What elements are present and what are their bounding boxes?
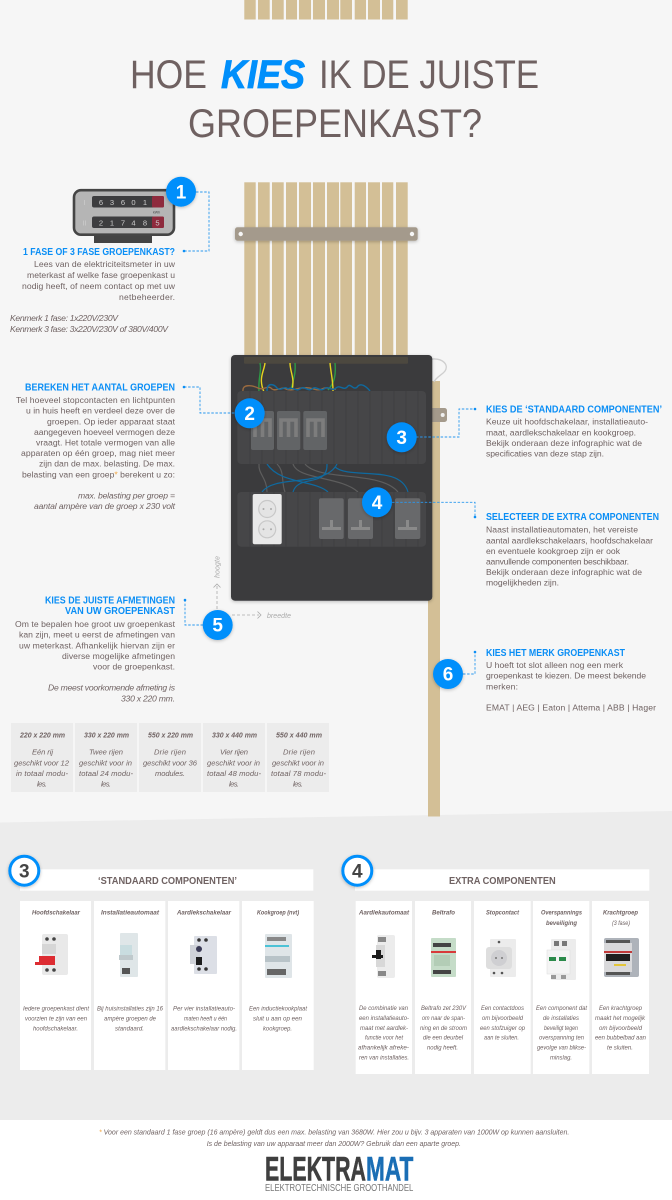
text block 3: standaard componenten: Keuze uit hoofdschakelaar, installatieauto- [486,417,648,427]
white footer band [0,1120,672,1200]
upper rail panel [237,391,426,464]
lower rail panel [237,492,426,547]
text block 1: fase: Kenmerk 3 fase: 3x220V/230V of 380V/400V [10,324,169,334]
text block 1: fase [10,247,176,334]
connector lines [183,192,476,674]
size 550 x 220: Drie rijen [154,748,186,756]
step badge 5: 5 [212,616,223,637]
size 220 x 220: geschikt voor 12 [14,758,70,768]
text block 2: aantal groepen: belasting van een groep* berekent u zo: [22,469,175,479]
card: installatieautomaat [94,901,165,1070]
electricity meter: 7 [121,218,125,228]
text block 3: standaard componenten: maat, aardlekschakelaar en kookgroep. [486,427,636,437]
size 330 x 220 [75,723,137,792]
size 220 x 220 [11,723,73,792]
size 550 x 440: Drie rijen [283,748,315,756]
size 550 x 220: modules. [155,769,185,778]
footnote: Is de belasting van uw apparaat meer dan 2000W? Gebruik dan een aparte groep. [207,1139,461,1148]
card: overspanningsbeveiliging: Een component dat [536,1005,588,1012]
size 330 x 220: totaal 24 modu- [79,769,133,778]
step badge 2: 2 [244,404,255,425]
electricity meter: 1 [110,218,114,228]
text block 4: extra componenten: aanvullende componenten beschikbaar. [486,556,629,566]
card: kookgroep: Kookgroep (nvt) [257,910,300,916]
text block 1: fase: Lees van de elektriciteitsmeter in uw [34,259,176,269]
photo: krachtgroep [604,938,639,977]
text block 5: afmetingen: VAN UW GROEPENKAST [65,606,175,617]
heading bar: EXTRA COMPONENTEN [449,875,556,887]
card: overspanningsbeveiliging: Overspannings [541,910,582,916]
card: stopcontact: een stofzuiger op [480,1025,525,1032]
text block 5: afmetingen [15,596,176,703]
lower wires [259,464,408,492]
electricity meter: I [83,198,86,207]
photo: beltrafo [431,938,456,977]
photo: kookgroep [265,934,292,978]
badge 3: 3 [19,862,30,882]
size 330 x 440 [203,723,265,792]
photo: hoofdschakelaar [35,934,68,975]
photo: aardlekautomaat [372,935,395,978]
card: aardlekautomaat: afhankelijk afreke- [358,1045,410,1052]
electricity meter: 8 [143,218,147,228]
logo: Elektramat: MAT [366,1151,413,1189]
electricity meter [74,190,174,243]
card: installatieautomaat: Bij huisinstallaties zijn 16 [97,1006,163,1012]
card: kookgroep [242,901,314,1070]
size 550 x 220 [139,723,201,792]
step badge 3 [387,422,417,452]
badge 4: 4 [352,862,363,882]
card: overspanningsbeveiliging: beveiliging [546,920,578,927]
dimension arrows [214,556,291,620]
grey components section background [0,811,672,1120]
heading bar [20,869,313,891]
photo: aardlekschakelaar [190,936,217,974]
title: HOE [130,53,207,97]
text block 2: aantal groepen: apparaten op één groep, mag niet meer [21,448,175,458]
text block 3: standaard componenten [486,404,662,459]
terminal bar [244,357,408,364]
card: kookgroep: kookgroep. [263,1026,292,1032]
card: beltrafo [415,901,471,1074]
text block 3: standaard componenten: specificaties van deze stap zijn. [486,449,604,459]
card: aardlekautomaat: een installatieauto- [359,1015,410,1022]
card: krachtgroep [592,901,649,1074]
card: installatieautomaat: standaard. [115,1026,144,1032]
electricity meter: 1 [143,198,147,207]
title: IK DE JUISTE [319,53,539,97]
badge 4 [343,856,372,885]
card: hoofdschakelaar: hoofdschakelaar. [33,1026,78,1032]
wooden slats behind the cabinet [244,182,408,362]
card: aardlekschakelaar: aardlekschakelaar nodig. [171,1026,237,1032]
text block 4: extra componenten [486,512,659,588]
card: beltrafo: nodig heeft. [427,1045,458,1052]
card: stopcontact: Stopcontact [486,910,520,916]
card: krachtgroep: om bijvoorbeeld [599,1025,642,1032]
card: overspanningsbeveiliging: gevolge van blikse- [537,1045,587,1052]
text block 2: aantal groepen: Tel hoeveel stopcontacten en lichtpunten [16,395,175,405]
text block 6: merk: EMAT | AEG | Eaton | Attema | ABB | Hager [486,703,656,713]
text block 3: standaard componenten: Bekijk onderaan deze infographic wat de [486,438,642,448]
card: krachtgroep: te sluiten. [607,1045,633,1052]
size 550 x 440: totaal 78 modu- [271,769,326,778]
step badge 6 [433,659,463,689]
text block 2: aantal groepen: BEREKEN HET AANTAL GROEPEN [25,382,175,394]
step badge 3: 3 [396,428,407,449]
text block 2: aantal groepen: u in huis heeft en verdeel deze over de [26,406,175,416]
card: installatieautomaat: ampère groepen de [104,1016,156,1022]
card: kookgroep: sluit u aan op een [253,1016,302,1022]
size 330 x 440: totaal 48 modu- [207,769,261,778]
card: overspanningsbeveiliging: beveiligt tegen [544,1025,578,1032]
electricity meter: 2 [99,218,103,228]
card: aardlekautomaat: functie voor het [365,1035,404,1042]
text block 1: fase: nodig heeft, of neem contact op met uw [22,281,176,291]
step badge 4 [362,487,392,517]
size 330 x 440: les. [229,780,239,788]
text block 5: afmetingen: Om te bepalen hoe groot uw groepenkast [15,619,176,629]
card: stopcontact: om bijvoorbeeld [482,1015,523,1022]
upper wires [243,363,370,392]
text block 2: aantal groepen: zijn dan de max. belasting. De max. [39,459,175,469]
text block 5: afmetingen: kan zijn, meet u eerst de afmetingen van [19,630,175,640]
text block 4: extra componenten: Naast installatieautomaten, het vereiste [486,525,638,535]
text block 5: afmetingen: uw meterkast. Afhankelijk hiervan zijn er [19,640,175,650]
card: krachtgroep: een bubbelbad aan [595,1035,646,1042]
card: krachtgroep: Krachtgroep [603,910,638,916]
size 550 x 220: 550 x 220 mm [148,730,193,740]
title: GROEPENKAST? [188,102,482,146]
electricity meter: 6 [99,198,103,207]
card: overspanningsbeveiliging: minslag. [550,1054,572,1061]
footnote [99,1128,569,1148]
size 550 x 440 [267,723,329,792]
card: hoofdschakelaar [20,901,91,1070]
text block 6: merk: groepenkast te kiezen. De meest bekende [486,671,646,681]
step badge 1 [166,177,196,207]
electricity meter: 3 [110,198,114,207]
wooden post on the right [428,381,440,817]
text block 2: aantal groepen: vraagt. Het totale vermogen van alle [36,437,175,447]
size 550 x 220: geschikt voor 36 [143,758,198,768]
card: hoofdschakelaar: Hoofdschakelaar [32,910,80,916]
card: kookgroep: Een inductiekookplaat [249,1006,308,1012]
step badge 1: 1 [176,182,187,204]
card: aardlekschakelaar [168,901,239,1070]
text block 4: extra componenten: Bekijk onderaan deze infographic wat de [486,567,642,577]
card: aardlekschakelaar: Aardlekschakelaar [176,910,231,916]
size table [11,723,329,792]
card: krachtgroep: Een krachtgroep [599,1005,642,1012]
top wooden strip [244,0,408,20]
text block 6: merk: merken: [486,681,518,691]
text block 5: afmetingen: 330 x 220 mm. [121,693,175,703]
card: aardlekschakelaar: Per vier installatieauto- [173,1006,236,1012]
panel: extra componenten [343,856,649,1074]
text block 1: fase: 1 FASE OF 3 FASE GROEPENKAST? [23,247,175,258]
electricity meter: 5 [155,218,160,228]
card: aardlekautomaat: Aardlekautomaat [358,910,410,916]
heading bar [355,869,649,891]
card: aardlekschakelaar: maten heeft u één [184,1016,227,1022]
text block 5: afmetingen: diverse mogelijke afmetingen [62,651,175,661]
card: hoofdschakelaar: voorzien te zijn van een [25,1016,87,1022]
photo: stopcontact [486,939,516,977]
text block 4: extra componenten: aantal aardlekschakelaars, hoofdschakelaar [486,535,653,545]
badge 3 [10,856,39,885]
photo: overspanningsbeveiliging [547,939,576,980]
card: overspanningsbeveiliging: de installaties [543,1015,580,1022]
dimension arrows: breedte [267,613,291,620]
text block 4: extra componenten: en eventuele kookgroep zijn er ook [486,546,621,556]
electricity meter: II [82,218,87,228]
card: beltrafo: ning en de stroom [420,1025,467,1032]
electricity meter: 6 [121,198,125,207]
text block 2: aantal groepen: aangegeven hoeveel vermogen deze [34,427,175,437]
size 330 x 440: Vier rijen [220,748,248,756]
title: KIES [221,53,305,97]
white socket [253,494,282,544]
size 330 x 220: les. [101,780,111,788]
step badge 4: 4 [372,493,383,514]
step badge 6: 6 [443,665,453,686]
card: aardlekautomaat: De combinatie van [359,1005,408,1012]
mounting bar [235,227,418,241]
text block 2: aantal groepen: aantal ampère van de groep x 230 volt [34,501,176,511]
text block 2: aantal groepen: max. belasting per groep = [78,491,175,501]
card: krachtgroep: maakt het mogelijk [595,1015,646,1022]
card: stopcontact: aan te sluiten. [484,1035,519,1042]
size 330 x 440: 330 x 440 mm [212,730,257,740]
card: stopcontact [474,901,531,1074]
text block 4: extra componenten: mogelijkheden zijn. [486,578,559,588]
card: beltrafo: die een deurbel [423,1035,463,1042]
text block 6: merk [486,648,656,713]
size 330 x 220: 330 x 220 mm [84,730,129,740]
card: aardlekautomaat [356,901,412,1074]
card: installatieautomaat: Installatieautomaat [101,910,160,916]
logo: Elektramat: ELEKTRA [265,1151,366,1189]
heading bar: ‘STANDAARD COMPONENTEN’ [98,875,237,887]
size 550 x 440: geschikt voor in [272,758,324,768]
card: stopcontact: Een contactdoos [481,1005,525,1012]
standard modules [251,411,327,450]
step badge 2 [235,398,265,428]
electricity meter: 4 [131,218,136,228]
card: krachtgroep: (3 fase) [612,920,630,927]
size 330 x 440: geschikt voor in [207,758,260,768]
size 330 x 220: geschikt voor in [79,758,132,768]
electricity meter: kWh [153,210,160,214]
size 550 x 440: les. [293,780,303,788]
card: aardlekautomaat: ren van installaties. [359,1054,409,1061]
size 220 x 220: Eén rij [32,748,53,756]
size 220 x 220: 220 x 220 mm [19,730,65,740]
dimension arrows: hoogte [214,556,222,578]
card: hoofdschakelaar: Iedere groepenkast dient [23,1006,90,1012]
card: aardlekautomaat: maat met aardlek- [360,1025,409,1032]
card: overspanningsbeveiliging [533,901,589,1074]
footnote: * Voor een standaard 1 fase groep (16 ampère) geldt dus een max. belasting van 3680W. Hier zou u bijv. 3 apparaten van 1000W op kunnen aansluiten. [99,1128,569,1137]
card: beltrafo: Beltrafo [432,910,455,916]
logo: Elektramat: ELEKTROTECHNISCHE GROOTHANDEL [265,1182,413,1194]
size 220 x 220: les. [37,780,47,788]
card: beltrafo: Beltrafo zet 230V [421,1005,467,1012]
text block 2: aantal groepen: groepen. Op ieder apparaat staat [47,416,176,426]
step badge 5 [203,610,233,640]
text block 1: fase: Kenmerk 1 fase: 1x220V/230V [10,313,119,323]
text block 5: afmetingen: De meest voorkomende afmeting is [48,683,176,693]
electricity meter: 0 [131,198,136,207]
size 220 x 220: in totaal modu- [16,769,68,778]
card: overspanningsbeveiliging: overspanning ten [539,1035,584,1042]
groepenkast cabinet [231,355,432,601]
photo: installatieautomaat [119,933,138,977]
size 550 x 440: 550 x 440 mm [276,730,322,740]
text block 2: aantal groepen [16,382,176,511]
text block 1: fase: netbeheerder. [119,292,175,302]
extra modules [319,498,420,539]
text block 6: merk: KIES HET MERK GROEPENKAST [486,648,625,659]
card: beltrafo: om naar de span- [422,1015,466,1022]
text block 5: afmetingen: voor de groepenkast. [93,661,175,671]
panel: standaard componenten [10,856,314,1070]
size 330 x 220: Twee rijen [89,748,123,756]
text block 6: merk: U hoeft tot slot alleen nog een merk [486,660,624,670]
text block 1: fase: meterkast af welke fase groepenkast u [27,270,175,280]
hook and side bracket [430,359,447,422]
text block 5: afmetingen: KIES DE JUISTE AFMETINGEN [45,596,175,606]
title [130,53,539,146]
